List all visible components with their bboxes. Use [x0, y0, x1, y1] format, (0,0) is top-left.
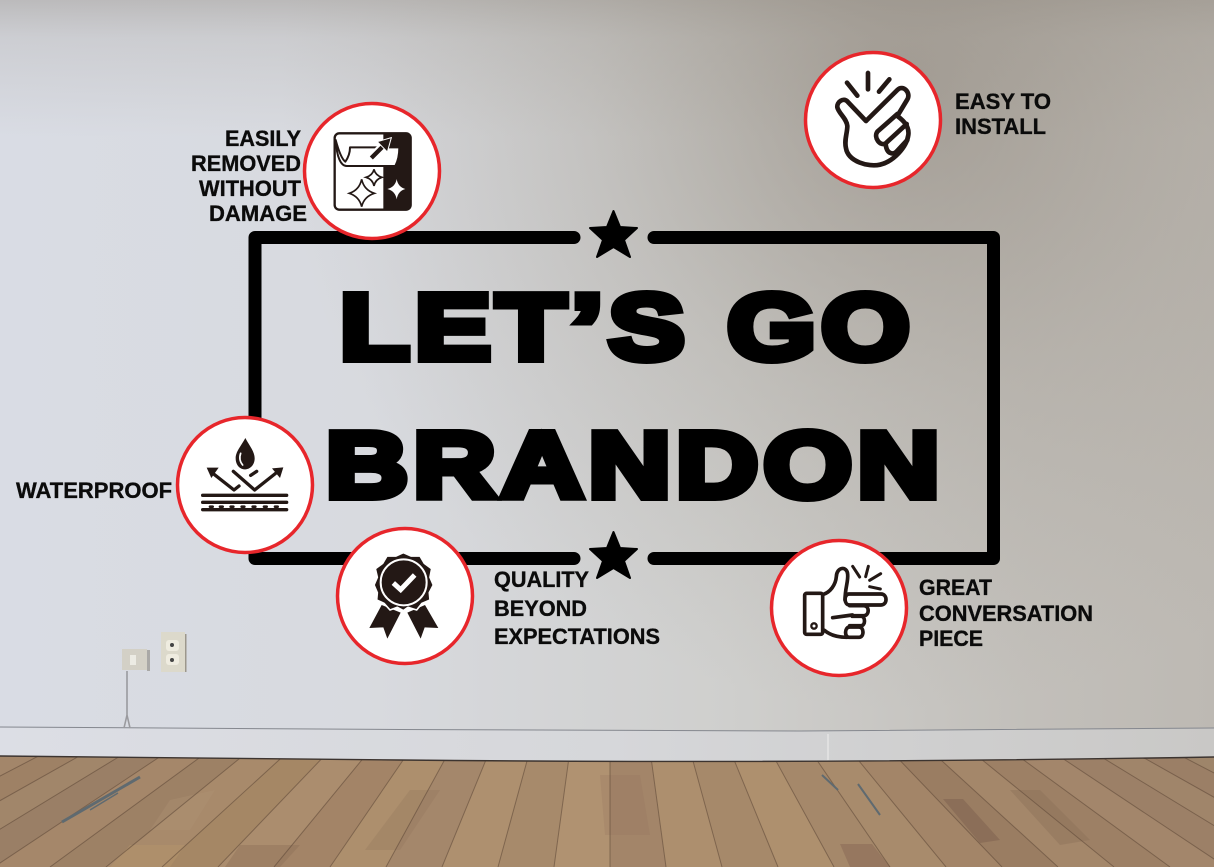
feature: quality beyond expectations	[338, 528, 660, 664]
icon: peeling sticker with sparkles	[335, 133, 411, 210]
icon: pointing spark	[853, 566, 881, 589]
badge circle	[178, 418, 312, 552]
feature: easily removed	[191, 104, 440, 238]
label: quality beyond expectations: EXPECTATIONS	[494, 624, 660, 649]
title line two: BRANDON	[326, 413, 945, 517]
feature: waterproof	[16, 418, 312, 552]
label: great conversation piece: PIECE	[919, 626, 983, 651]
label: easily removed without damage	[191, 126, 307, 226]
feature: great conversation piece	[772, 540, 1093, 676]
badge circle	[806, 52, 940, 188]
label: easy to install	[955, 89, 1051, 139]
title line one: LET’S GO	[340, 275, 915, 379]
icon: hand pointing	[805, 568, 886, 637]
feature: easy to install	[806, 52, 1051, 188]
baseboard	[0, 727, 1214, 761]
label: easily removed without damage: DAMAGE	[209, 201, 307, 226]
bottom star	[590, 532, 637, 578]
badge circle	[338, 528, 472, 664]
label: easy to install: EASY TO	[955, 89, 1051, 114]
label: quality beyond expectations: BEYOND	[494, 596, 587, 621]
label: great conversation piece: GREAT	[919, 575, 992, 600]
icon: water drop on layered membrane	[203, 438, 287, 510]
label: easily removed without damage: REMOVED	[191, 151, 301, 176]
label: quality beyond expectations: QUALITY	[494, 567, 589, 592]
label: easily removed without damage: WITHOUT	[199, 176, 301, 201]
label: easily removed without damage: EASILY	[225, 126, 301, 151]
wall outlet and phone jack	[122, 632, 186, 728]
label: quality beyond expectations	[494, 567, 660, 649]
label: great conversation piece	[919, 575, 1093, 651]
label: great conversation piece: CONVERSATION	[919, 601, 1093, 626]
decal frame	[255, 238, 994, 558]
top star	[590, 211, 637, 257]
badge circle	[772, 540, 906, 676]
wood floor	[0, 750, 1214, 867]
icon: award rosette with check	[369, 553, 438, 639]
label: waterproof: WATERPROOF	[16, 478, 172, 503]
icon: finger snap hand	[837, 73, 908, 165]
label: easy to install: INSTALL	[955, 114, 1046, 139]
badge circle	[304, 104, 440, 238]
title	[326, 275, 945, 517]
